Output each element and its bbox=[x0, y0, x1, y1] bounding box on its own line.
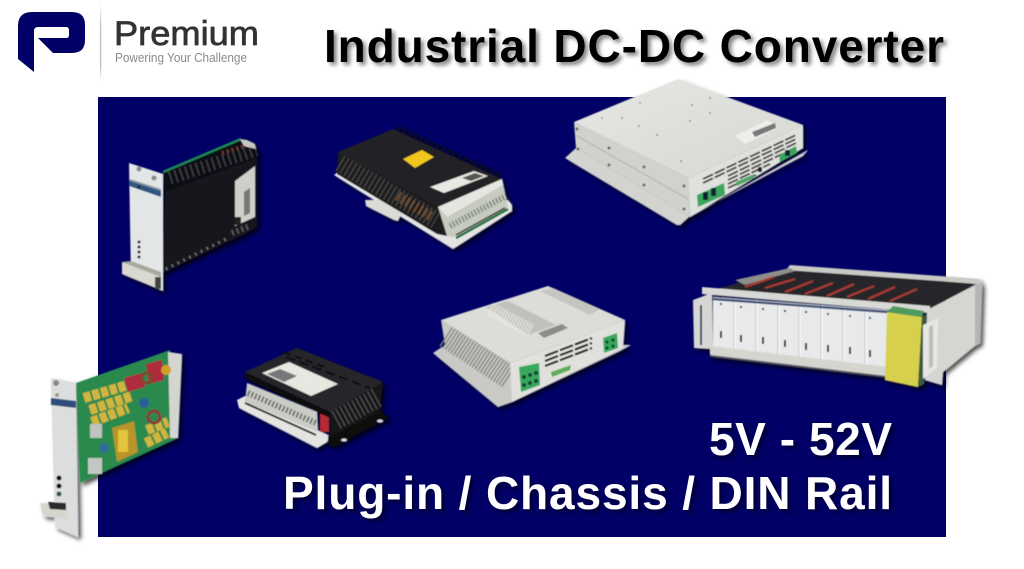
handle bbox=[122, 262, 161, 290]
signal terminal bbox=[736, 174, 754, 186]
right rail bbox=[168, 352, 182, 438]
product label bbox=[235, 166, 255, 226]
navy background panel bbox=[98, 97, 946, 537]
transformer bbox=[112, 421, 138, 462]
front top rail bbox=[702, 287, 930, 313]
green connector right bbox=[603, 333, 618, 353]
yellow PCB card bbox=[885, 312, 922, 387]
green connector right bbox=[779, 146, 797, 162]
plug-in modules bbox=[713, 297, 888, 375]
flanges bbox=[565, 148, 808, 225]
top plate bbox=[441, 286, 625, 363]
right handle bbox=[923, 318, 938, 379]
red capacitors bbox=[124, 373, 145, 392]
front plate bbox=[129, 163, 163, 291]
logo mark: P bbox=[18, 12, 85, 72]
terminal block bbox=[438, 179, 508, 237]
product: compact black DIN rail module bbox=[237, 348, 389, 448]
company logo bbox=[18, 2, 259, 82]
terminal block bbox=[245, 383, 318, 432]
logo wordmark: Premium bbox=[114, 15, 259, 53]
title: Industrial DC-DC Converter bbox=[324, 20, 944, 72]
base plate bbox=[334, 172, 512, 249]
yellow transformer bbox=[403, 150, 434, 168]
side with fins bbox=[337, 152, 447, 236]
voltage range caption: 5V - 52V bbox=[709, 413, 892, 465]
front vents bbox=[545, 338, 592, 366]
side vents bbox=[330, 382, 383, 437]
mounting base bbox=[237, 396, 330, 448]
black top bbox=[245, 348, 383, 412]
black flange bbox=[328, 411, 389, 447]
product: silver enclosed chassis converter bbox=[565, 79, 808, 225]
module handles bbox=[710, 346, 888, 376]
side panel bbox=[925, 283, 980, 385]
sticker bbox=[430, 171, 488, 193]
mounting flange bbox=[433, 345, 631, 407]
grey components bbox=[88, 458, 102, 474]
left handle bbox=[693, 293, 713, 349]
product: rack with plug-in modules bbox=[693, 265, 982, 387]
product: open-frame plug-in PCB module bbox=[40, 350, 182, 537]
mounting types caption: Plug-in / Chassis / DIN Rail bbox=[283, 467, 892, 519]
logo tagline: Powering Your Challenge bbox=[115, 50, 247, 65]
green connector left bbox=[697, 183, 725, 207]
green connector left bbox=[519, 363, 540, 392]
left side bbox=[574, 122, 690, 217]
product: black chassis module with yellow transformer bbox=[334, 128, 512, 249]
left heat sink side bbox=[441, 320, 512, 393]
label on top bbox=[735, 120, 778, 144]
yellow capacitors bbox=[84, 385, 168, 443]
green terminal bbox=[551, 365, 571, 377]
status LEDs bbox=[720, 303, 871, 357]
label bbox=[538, 324, 568, 338]
handle bbox=[40, 503, 68, 519]
top vents bbox=[486, 301, 556, 335]
rear rails bbox=[786, 265, 980, 284]
front vent slots bbox=[703, 135, 796, 188]
logo divider bbox=[100, 2, 101, 82]
heat sink top band bbox=[163, 139, 257, 192]
front plate bbox=[51, 378, 78, 537]
product: silver convection-cooled converter bbox=[433, 286, 631, 407]
front side bbox=[688, 125, 803, 217]
rack interior bbox=[713, 268, 975, 310]
inductors bbox=[142, 373, 152, 383]
front panel bbox=[510, 320, 625, 402]
red card guides bbox=[745, 277, 917, 301]
top plate bbox=[574, 79, 803, 178]
black body bbox=[163, 158, 257, 273]
black top bbox=[338, 129, 502, 207]
green PCB bbox=[76, 350, 178, 483]
product: black plug-in module bbox=[122, 139, 257, 291]
